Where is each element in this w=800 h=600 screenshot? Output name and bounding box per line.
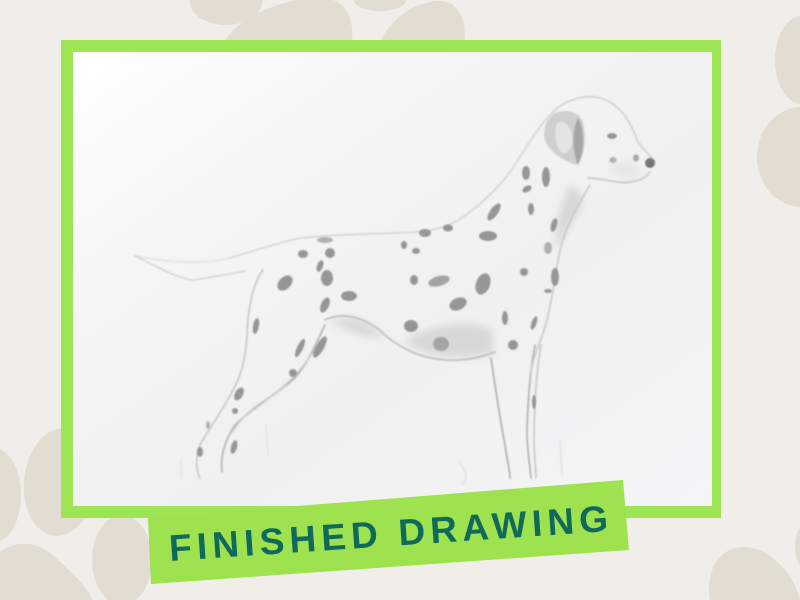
banner label: FINISHED DRAWING [168, 498, 614, 569]
ear [544, 111, 585, 165]
photo of the pencil drawing [73, 52, 712, 506]
green frame [61, 40, 721, 518]
banner shape [148, 480, 629, 584]
soft shading [330, 162, 640, 357]
pencil sketch of a dalmatian [135, 97, 655, 484]
caption banner [148, 480, 629, 584]
spots [197, 133, 655, 457]
outline strokes [135, 97, 655, 484]
paper [73, 52, 712, 506]
